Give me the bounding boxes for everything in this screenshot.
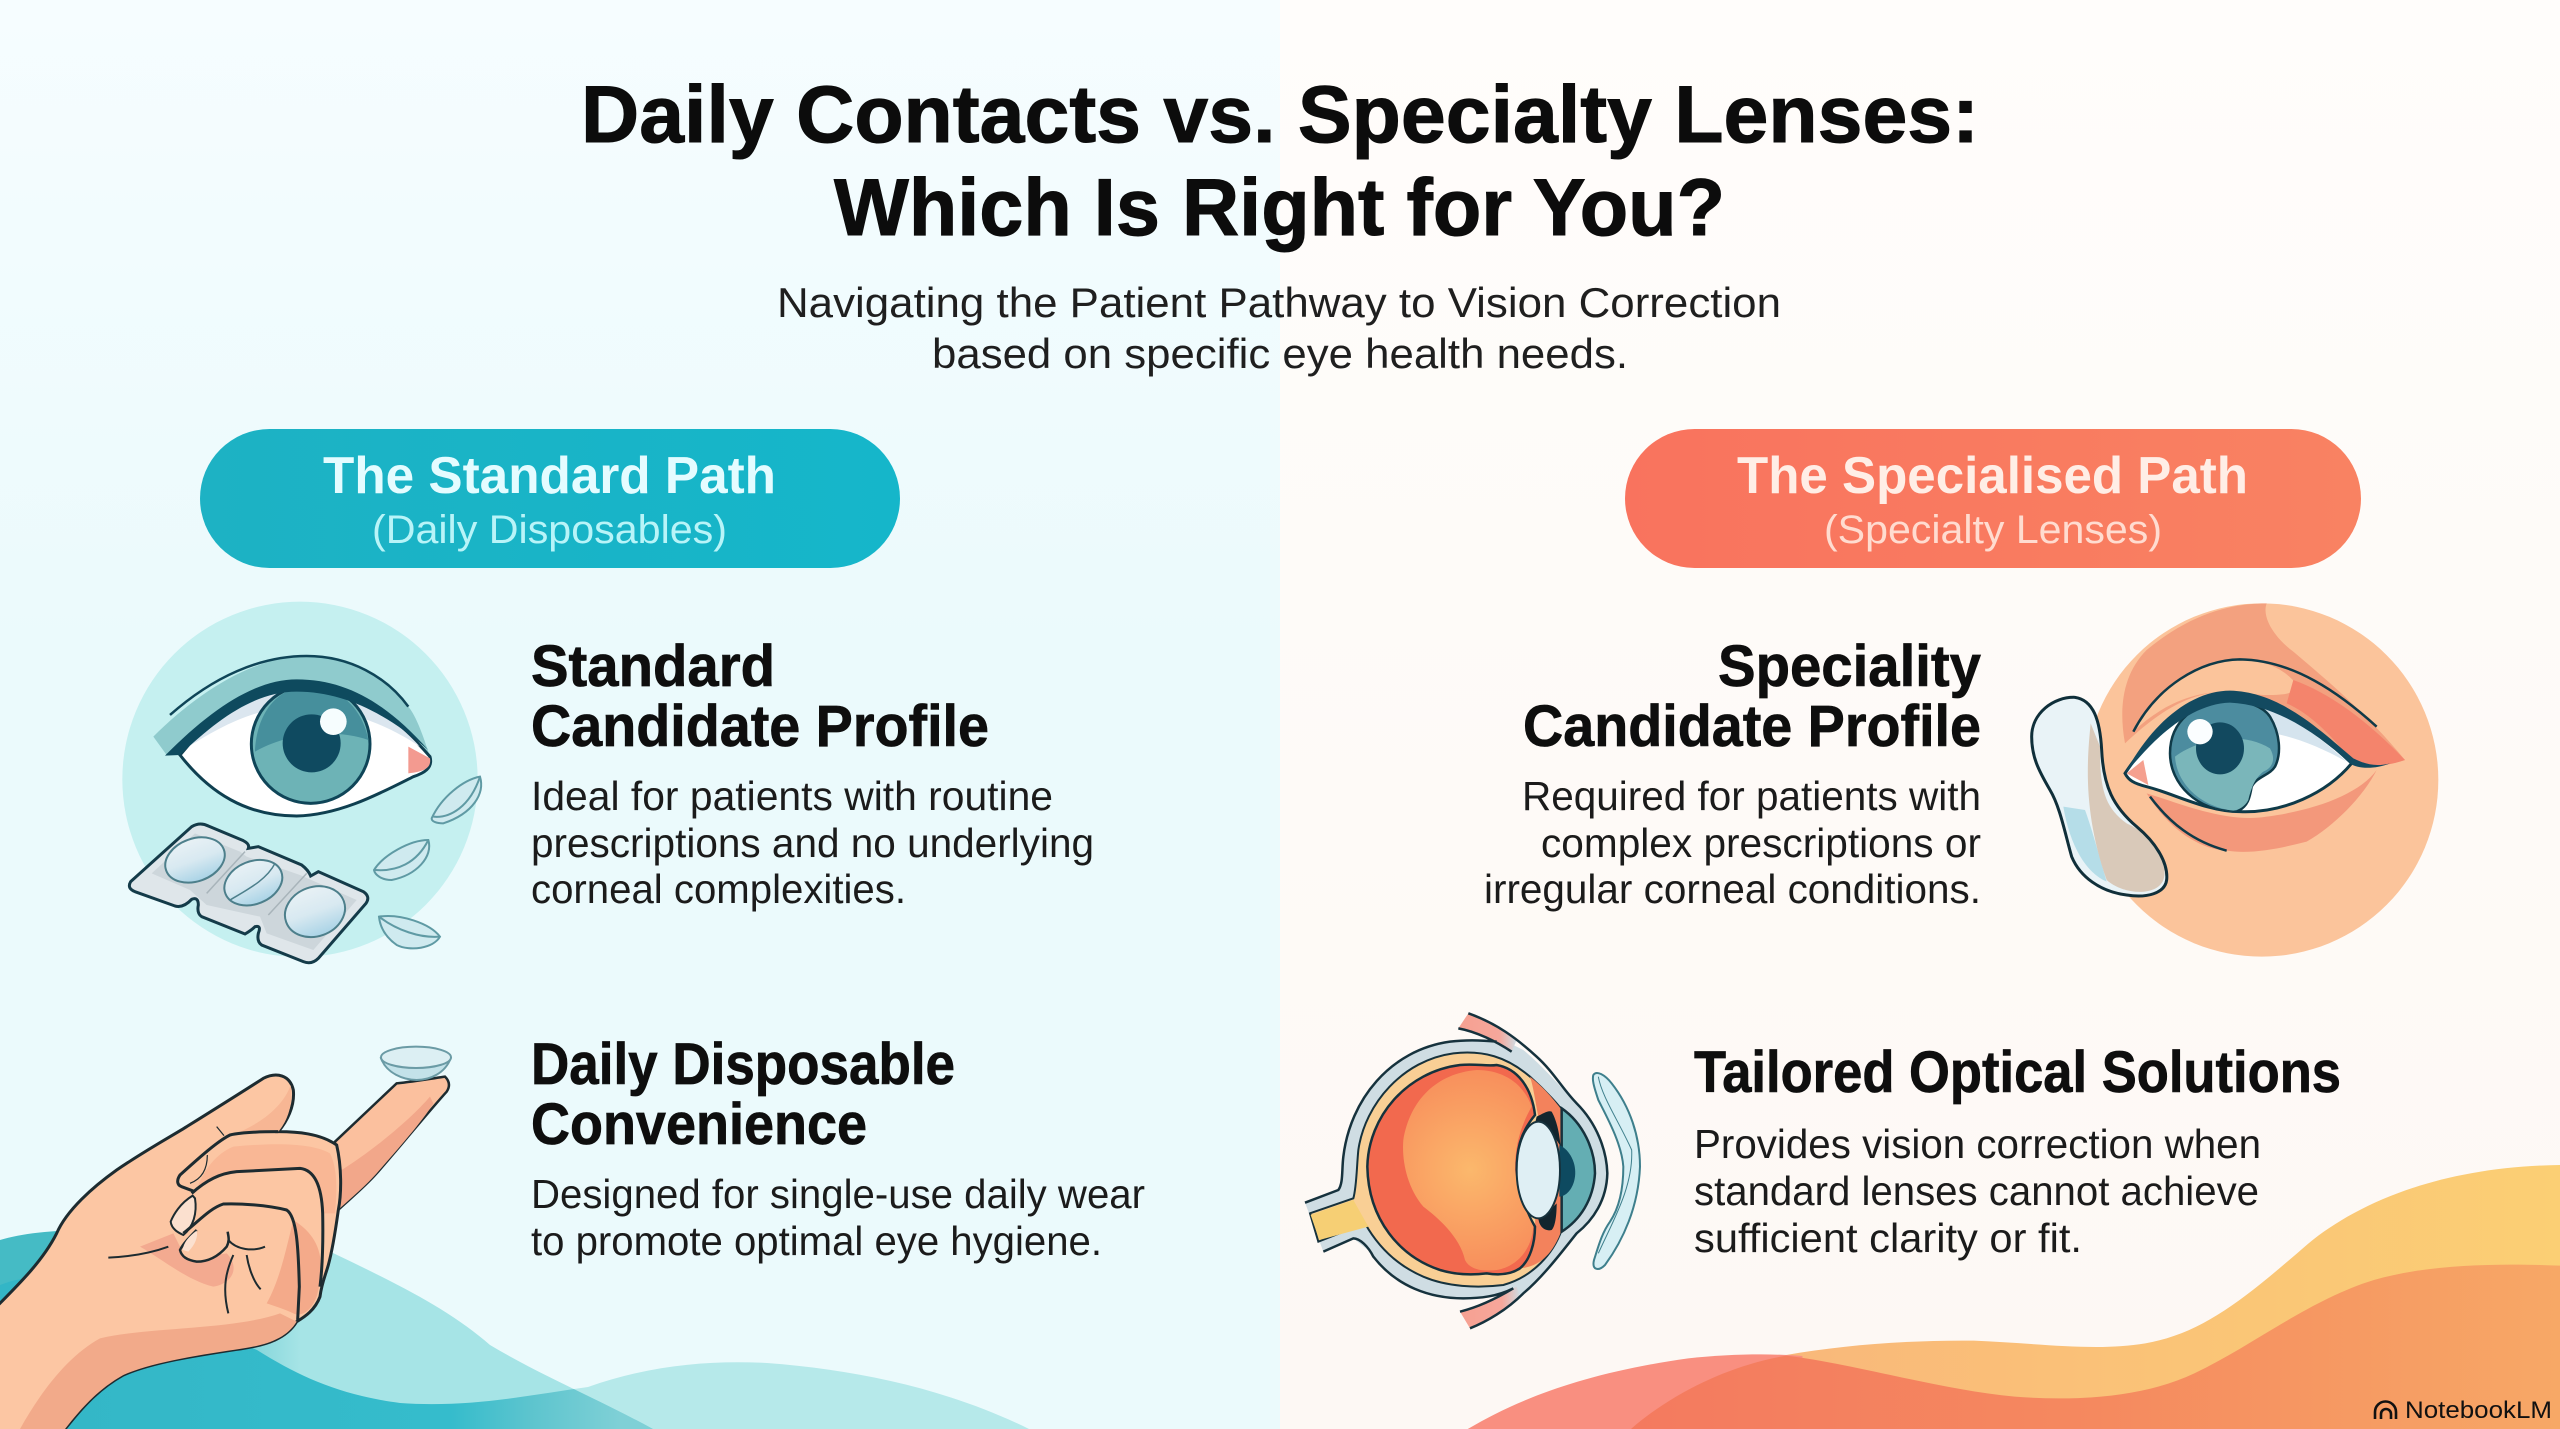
- pill: The Specialised Path: [1625, 429, 2361, 568]
- text: Tailored Optical Solutions: sufficient clarity or fit.: [1694, 1215, 2082, 1261]
- pupil: [1559, 1145, 1575, 1197]
- text: Tailored Optical Solutions: standard lenses cannot achieve: [1694, 1168, 2259, 1214]
- text: Daily Disposable Convenience: [531, 1032, 1145, 1264]
- text: Daily Disposable Convenience: Designed for single-use daily wear: [531, 1171, 1145, 1217]
- icon: eye anatomy cross-section: [1305, 1013, 1640, 1328]
- background: right half: [1280, 0, 2560, 1429]
- icon: index finger: [335, 1077, 449, 1211]
- text: Tailored Optical Solutions: [1694, 1040, 2341, 1261]
- text: Standard Candidate Profile: Standard: [531, 634, 775, 699]
- icon: hand holding contact lens: [0, 1047, 451, 1429]
- text: Daily Disposable Convenience: Convenience: [531, 1092, 867, 1157]
- background: left half: [0, 0, 1280, 1429]
- icon: loose lenses: [374, 777, 481, 948]
- pill: The Specialised Path: The Specialised Path: [1737, 447, 2248, 505]
- title: [581, 70, 1979, 253]
- text: Standard Candidate Profile: Candidate Profile: [531, 694, 989, 759]
- icon: blister pack: [129, 824, 368, 963]
- iris: [1535, 1111, 1561, 1230]
- icon: lens on fingertip: [381, 1047, 451, 1080]
- icon: specialty eye with scleral lens: [2032, 603, 2438, 957]
- text: Speciality Candidate Profile: Required for patients with: [1522, 773, 1981, 819]
- text: Speciality Candidate Profile: Candidate Profile: [1523, 694, 1981, 759]
- choroid and optic nerve: [1310, 1053, 1562, 1287]
- icon: scleral lens: [2032, 697, 2167, 896]
- pill: The Standard Path: (Daily Disposables): [372, 508, 727, 552]
- text: Speciality Candidate Profile: irregular corneal conditions.: [1484, 866, 1981, 912]
- icon: contact lens side view: [1593, 1073, 1640, 1269]
- text: Standard Candidate Profile: [531, 634, 1094, 912]
- right decorative waves: [1468, 1165, 2560, 1429]
- text: Tailored Optical Solutions: Provides vision correction when: [1694, 1121, 2261, 1167]
- vitreous body: [1367, 1065, 1535, 1274]
- subtitle: [777, 279, 1781, 377]
- text: Daily Disposable Convenience: Daily Disposable: [531, 1032, 955, 1097]
- pill: The Specialised Path: (Specialty Lenses): [1824, 508, 2162, 552]
- icon: standard eye with blister pack and lenses: [122, 602, 481, 963]
- pill: The Standard Path: [200, 429, 900, 568]
- text: Standard Candidate Profile: corneal complexities.: [531, 866, 906, 912]
- subtitle: Navigating the Patient Pathway to Vision Correction: [777, 279, 1781, 326]
- sclera: [1305, 1041, 1607, 1298]
- left decorative waves: [0, 1230, 1029, 1429]
- title: Which Is Right for You?: [834, 163, 1725, 253]
- crystalline lens: [1517, 1122, 1560, 1218]
- text: Speciality Candidate Profile: Speciality: [1718, 634, 1981, 699]
- text: Daily Disposable Convenience: to promote optimal eye hygiene.: [531, 1218, 1102, 1264]
- text: Speciality Candidate Profile: [1484, 634, 1981, 912]
- text: Tailored Optical Solutions: Tailored Optical Solutions: [1694, 1040, 2341, 1105]
- title: Daily Contacts vs. Specialty Lenses:: [581, 70, 1979, 160]
- text: Speciality Candidate Profile: complex prescriptions or: [1541, 820, 1981, 866]
- cornea: [1562, 1108, 1595, 1232]
- pill: The Standard Path: The Standard Path: [323, 447, 776, 505]
- icon: extraocular muscles: [1458, 1013, 1520, 1328]
- text: Standard Candidate Profile: Ideal for patients with routine: [531, 773, 1053, 819]
- text: Standard Candidate Profile: prescriptions and no underlying: [531, 820, 1094, 866]
- NotebookLM watermark: NotebookLM: [2405, 1397, 2552, 1424]
- subtitle: based on specific eye health needs.: [932, 330, 1628, 377]
